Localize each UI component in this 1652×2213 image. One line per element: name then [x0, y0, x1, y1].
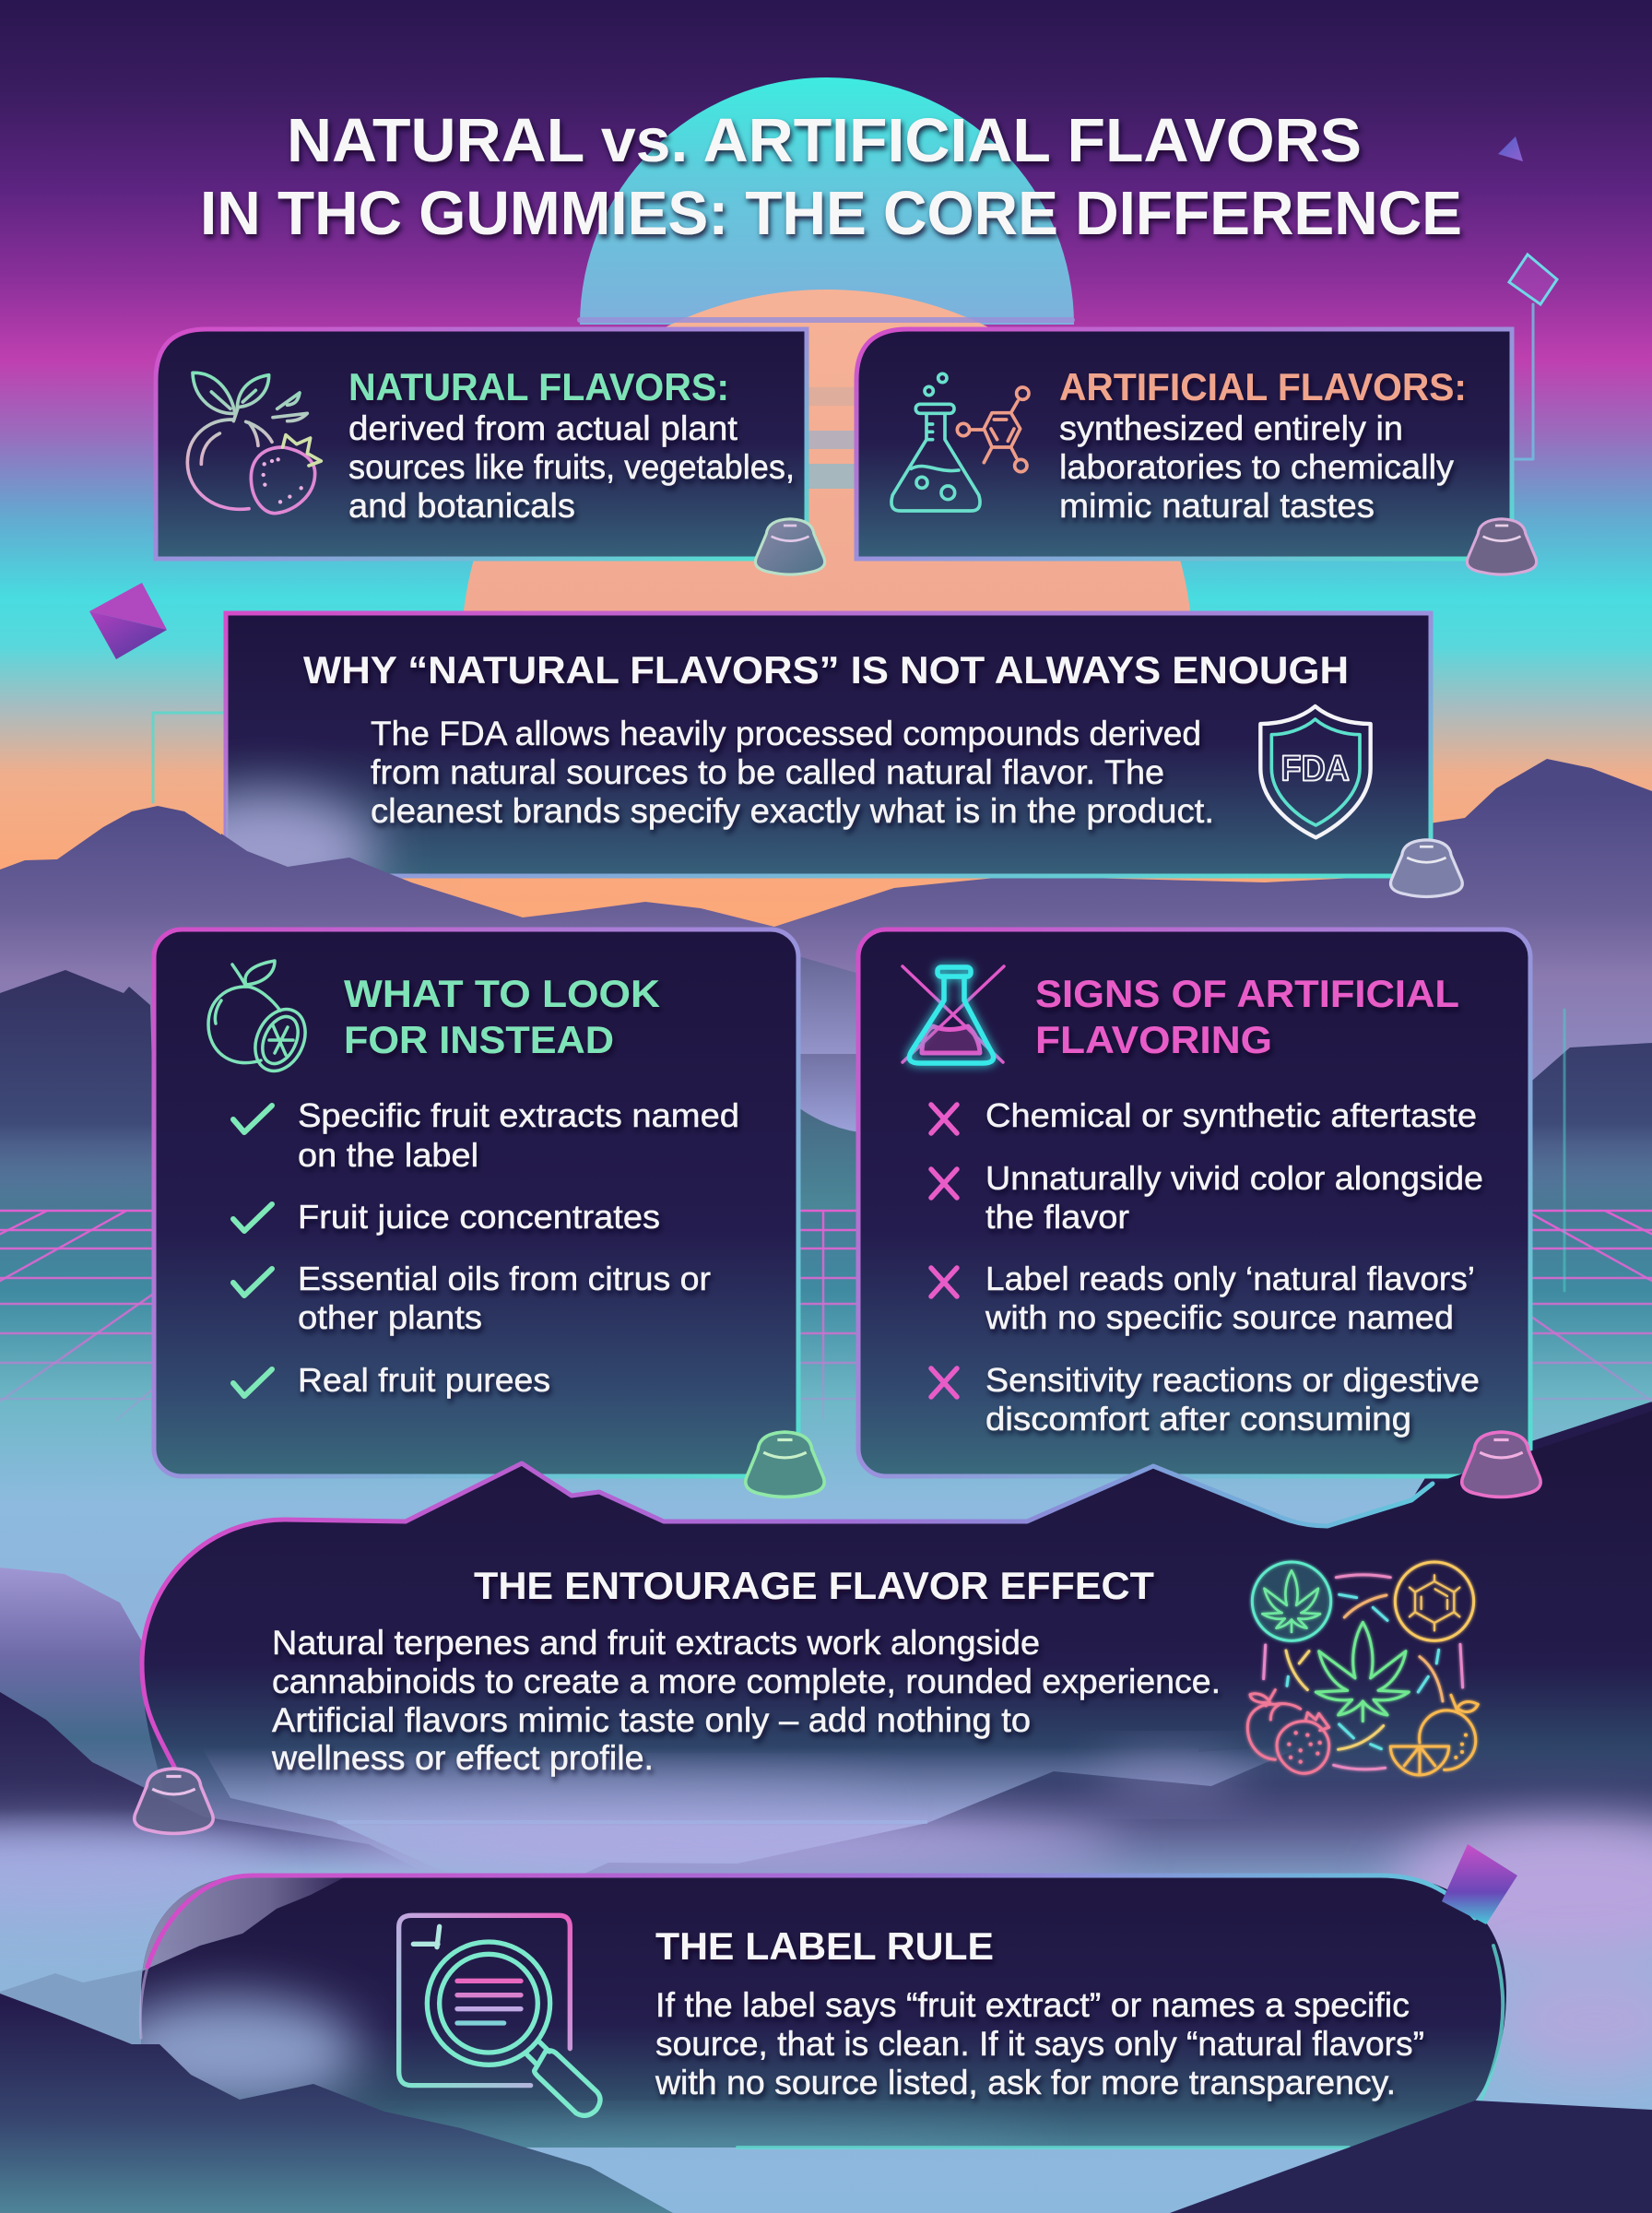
panel: artificial flavors [856, 329, 1512, 559]
check mark [233, 1269, 272, 1296]
icon: magnifying glass over label [399, 1915, 600, 2115]
panel: entourage flavor effect [142, 1411, 1652, 1826]
label rule body text [655, 1986, 1424, 2101]
warning list text: the flavor [985, 1198, 1129, 1236]
artificial flavors text: laboratories to chemically [1059, 448, 1455, 486]
why body text [371, 715, 1214, 830]
artificial flavors text: ARTIFICIAL FLAVORS: [1059, 365, 1467, 408]
natural flavors text: sources like fruits, vegetables, [348, 448, 795, 486]
gummy: what card [746, 1432, 824, 1497]
icon: flask and molecule [891, 373, 1029, 511]
panel: why natural flavors is not enough [221, 610, 1433, 884]
decorative gem: large left diamond [89, 583, 167, 659]
decorative gem: outlined diamond [1509, 254, 1557, 304]
label rule body text: If the label says “fruit extract” or names a specific [655, 1986, 1410, 2024]
icon: FDA shield [1260, 706, 1371, 837]
decorative gem: small triangle [1498, 136, 1523, 161]
cross mark [931, 1268, 957, 1296]
title: IN THC GUMMIES: THE CORE DIFFERENCE [200, 179, 1462, 248]
artificial flavors text [1059, 365, 1467, 525]
what to look heading: FOR INSTEAD [344, 1018, 614, 1061]
checklist [233, 1096, 739, 1399]
label rule heading: THE LABEL RULE [655, 1924, 994, 1968]
why body text: cleanest brands specify exactly what is in the product. [371, 792, 1214, 830]
what to look heading [344, 972, 660, 1061]
entourage body text: wellness or effect profile. [271, 1739, 654, 1777]
panel: signs of artificial flavoring [858, 929, 1530, 1476]
artificial flavors text: mimic natural tastes [1059, 487, 1375, 525]
entourage body text: Natural terpenes and fruit extracts work alongside [272, 1624, 1040, 1662]
checklist text: Real fruit purees [298, 1361, 550, 1399]
gummy: artificial card [1467, 519, 1537, 574]
checklist text: on the label [298, 1136, 478, 1174]
checklist text: Essential oils from citrus or [298, 1260, 711, 1297]
check mark [233, 1204, 272, 1231]
warning list text: Unnaturally vivid color alongside [985, 1159, 1483, 1197]
panel: what to look for instead [154, 929, 798, 1476]
decorative gem: bottom right diamond [1442, 1844, 1517, 1924]
check mark [233, 1369, 272, 1396]
entourage heading: THE ENTOURAGE FLAVOR EFFECT [474, 1564, 1154, 1607]
entourage body text [271, 1624, 1221, 1777]
warning list [931, 1096, 1483, 1438]
label rule body text: source, that is clean. If it says only “natural flavors” [655, 2025, 1424, 2063]
check mark [233, 1106, 272, 1132]
warning list text: Label reads only ‘natural flavors’ [985, 1260, 1475, 1297]
warning list text: discomfort after consuming [985, 1400, 1411, 1438]
icon: crossed-out flask [903, 966, 1004, 1063]
what to look heading: WHAT TO LOOK [344, 972, 660, 1015]
icon: FDA shield: FDA [1280, 749, 1350, 789]
signs heading: FLAVORING [1035, 1018, 1272, 1061]
natural flavors text: derived from actual plant [348, 409, 738, 447]
icon: entourage cycle [1247, 1562, 1478, 1775]
signs heading [1035, 972, 1459, 1061]
cross mark [931, 1368, 957, 1397]
panel: natural flavors [156, 329, 807, 559]
checklist text: Fruit juice concentrates [298, 1198, 660, 1236]
gummy: natural card [755, 519, 825, 574]
why body text: The FDA allows heavily processed compounds derived [371, 715, 1201, 752]
entourage body text: Artificial flavors mimic taste only – add nothing to [272, 1701, 1031, 1739]
checklist text: Specific fruit extracts named [298, 1096, 739, 1134]
icon: citrus fruit [208, 961, 314, 1079]
warning list text: Sensitivity reactions or digestive [985, 1361, 1480, 1399]
entourage body text: cannabinoids to create a more complete, rounded experience. [272, 1663, 1221, 1700]
warning list text [985, 1096, 1483, 1438]
cross mark [931, 1105, 957, 1133]
title: NATURAL vs. ARTIFICIAL FLAVORS [287, 106, 1362, 175]
signs heading: SIGNS OF ARTIFICIAL [1035, 972, 1459, 1015]
warning list text: Chemical or synthetic aftertaste [985, 1096, 1477, 1134]
cross mark [931, 1169, 957, 1198]
gummy: signs card [1462, 1432, 1540, 1497]
neon horizon grid [0, 1211, 1652, 1420]
label rule body text: with no source listed, ask for more transparency. [655, 2064, 1396, 2101]
checklist text: other plants [298, 1298, 482, 1336]
gummy: entourage panel [135, 1769, 213, 1833]
artificial flavors text: synthesized entirely in [1059, 409, 1403, 447]
why body text: from natural sources to be called natural flavor. The [371, 753, 1164, 791]
title [200, 106, 1462, 248]
gummy: why card [1390, 840, 1462, 896]
why heading: WHY “NATURAL FLAVORS” IS NOT ALWAYS ENOUGH [303, 648, 1349, 692]
decorative neon frames [153, 304, 1564, 1291]
checklist text [298, 1096, 739, 1399]
icon: fruit and strawberry [187, 373, 321, 514]
bottom foreground mountains [0, 1994, 1652, 2213]
natural flavors text: and botanicals [348, 487, 575, 525]
warning list text: with no specific source named [985, 1298, 1454, 1336]
panel: the label rule [0, 1872, 1652, 2213]
natural flavors text [348, 365, 795, 525]
natural flavors text: NATURAL FLAVORS: [348, 365, 729, 408]
